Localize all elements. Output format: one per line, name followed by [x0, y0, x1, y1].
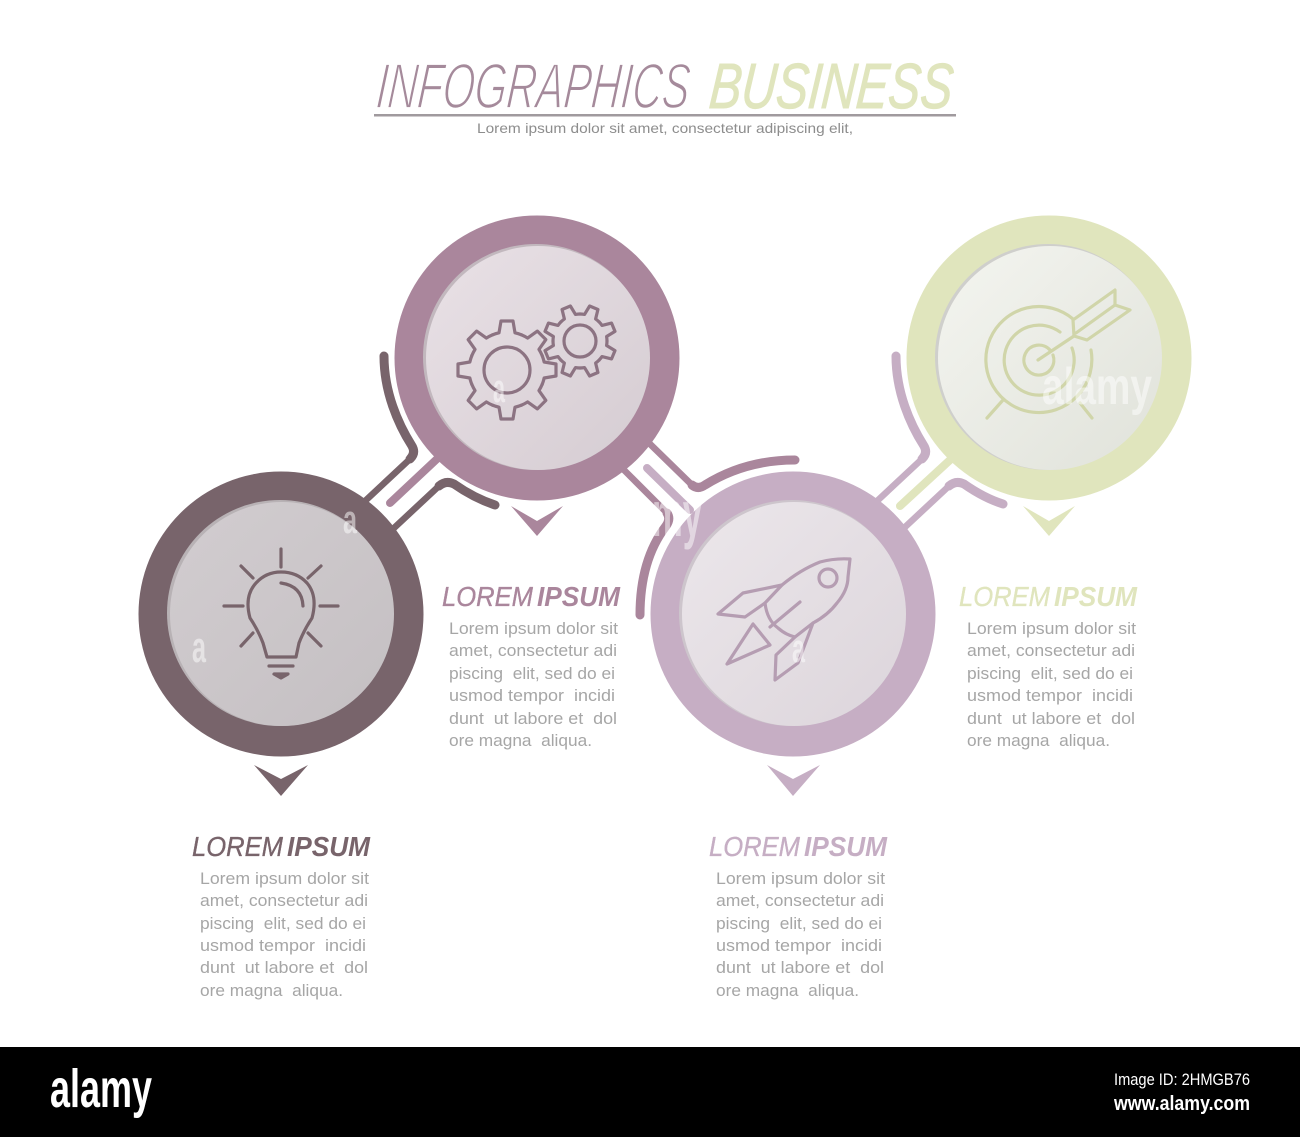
arrow: step 3 chevron — [767, 765, 820, 796]
text block: step 3: LOREM — [709, 831, 801, 862]
text block: step 1: amet, consectetur adi — [200, 891, 368, 910]
watermark: alamy: a — [192, 623, 206, 672]
footer url: www.alamy.com — [1113, 1093, 1250, 1115]
connector: step 2 to step 3 — [624, 444, 795, 615]
subtitle: Lorem ipsum dolor sit amet, consectetur adipiscing elit, — [477, 120, 853, 136]
arrow: step 2 chevron — [511, 506, 563, 536]
title: INFOGRAPHICS — [374, 50, 693, 122]
text block: step 2: ore magna aliqua. — [449, 731, 592, 750]
text block: step 4: amet, consectetur adi — [967, 641, 1135, 660]
text block: step 2: usmod tempor incidi — [449, 686, 615, 705]
text block: step 2: piscing elit, sed do ei — [449, 664, 615, 683]
text block: step 1: dunt ut labore et dol — [200, 958, 368, 977]
text block: step 1: IPSUM — [287, 831, 371, 862]
text block: step 3 — [709, 831, 888, 1000]
text block: step 2 — [442, 581, 621, 750]
arrow: step 4 chevron — [1023, 506, 1075, 536]
text block: step 4: Lorem ipsum dolor sit — [967, 619, 1136, 638]
icon: rocket — [718, 559, 850, 680]
text block: step 1: usmod tempor incidi — [200, 936, 366, 955]
text block: step 1: ore magna aliqua. — [200, 981, 343, 1000]
footer band — [0, 1047, 1300, 1137]
watermark: alamy: my — [652, 478, 702, 550]
watermark: alamy: a — [493, 367, 505, 411]
panel: step 1 circle — [138, 472, 424, 756]
text block: step 4 — [959, 581, 1138, 750]
title: BUSINESS — [707, 50, 956, 122]
text block: step 3: usmod tempor incidi — [716, 936, 882, 955]
icon: target with arrow — [986, 290, 1130, 418]
text block: step 1: piscing elit, sed do ei — [200, 914, 366, 933]
footer logo: alamy — [50, 1059, 152, 1119]
arrow: step 1 chevron — [254, 765, 308, 796]
panel: step 3 circle — [650, 472, 936, 756]
text block: step 4: piscing elit, sed do ei — [967, 664, 1133, 683]
text block: step 2: Lorem ipsum dolor sit — [449, 619, 618, 638]
watermark: alamy: alamy — [1042, 358, 1152, 416]
text block: step 1: Lorem ipsum dolor sit — [200, 869, 369, 888]
watermark: alamy: a — [343, 498, 357, 542]
watermark: alamy — [192, 358, 1152, 672]
watermark: alamy: a — [792, 627, 805, 671]
panel: step 4 circle — [906, 216, 1192, 500]
text block: step 3: dunt ut labore et dol — [716, 958, 884, 977]
title underline — [374, 114, 956, 116]
icon: light bulb — [224, 549, 338, 678]
text block: step 1 — [192, 831, 371, 1000]
text block: step 4: ore magna aliqua. — [967, 731, 1110, 750]
text block: step 4: dunt ut labore et dol — [967, 709, 1135, 728]
text block: step 1: LOREM — [192, 831, 284, 862]
footer image id: Image ID: 2HMGB76 — [1114, 1070, 1250, 1089]
text block: step 2: dunt ut labore et dol — [449, 709, 617, 728]
text block: step 2: IPSUM — [537, 581, 621, 612]
text block: step 2: amet, consectetur adi — [449, 641, 617, 660]
text block: step 3: ore magna aliqua. — [716, 981, 859, 1000]
panel: step 2 circle — [394, 216, 680, 500]
icon: gears — [458, 294, 627, 419]
text block: step 4: usmod tempor incidi — [967, 686, 1133, 705]
text block: step 3: piscing elit, sed do ei — [716, 914, 882, 933]
text block: step 3: Lorem ipsum dolor sit — [716, 869, 885, 888]
text block: step 2: LOREM — [442, 581, 534, 612]
text block: step 3: amet, consectetur adi — [716, 891, 884, 910]
connector: step 3 to step 4 — [876, 356, 1003, 528]
text block: step 3: IPSUM — [804, 831, 888, 862]
text block: step 4: IPSUM — [1054, 581, 1138, 612]
connector: step 1 to step 2 — [364, 356, 495, 528]
text block: step 4: LOREM — [959, 581, 1051, 612]
